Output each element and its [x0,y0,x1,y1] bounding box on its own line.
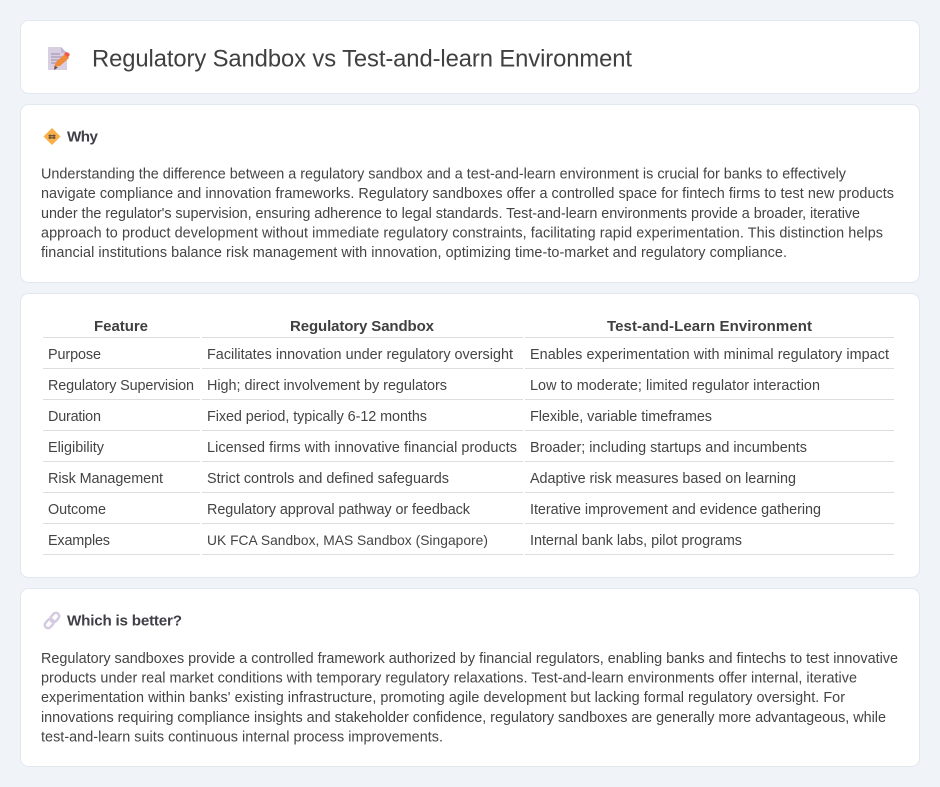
icon: chain link [43,612,61,629]
row: regulatory supervision: Regulatory Supervision [48,378,194,394]
row: purpose: Enables experimentation with minimal regulatory impact [530,347,889,363]
row: outcome: Regulatory approval pathway or feedback [207,502,471,518]
row: eligibility: Eligibility [48,440,105,456]
row: risk management: Risk Management [48,471,163,487]
row: regulatory supervision: High; direct involvement by regulators [207,378,447,394]
row: purpose: Facilitates innovation under regulatory oversight [207,347,513,363]
row: eligibility [48,440,807,456]
heading: which is better: Which is better? [67,612,182,630]
row: duration: Duration [48,409,101,425]
table header [94,318,812,335]
row: examples: Examples [48,533,110,549]
text block: which is better explanation: experimentation within banks' existing infrastructure, promoting agile development but lacking formal regulatory oversight. For [41,690,845,706]
heading: why: Why [67,128,99,146]
text block: why explanation: approach to product development without immediate regulatory constraints, facilitating rapid experimentation. This distinction helps [41,225,883,241]
row: outcome [48,502,821,518]
text block: which is better explanation: products under real market conditions with temporary regulatory relaxations. Test-and-learn environments offer internal, iterative [41,671,857,687]
row: eligibility: Broader; including startups and incumbents [530,440,807,456]
text block: which is better explanation [41,651,898,745]
row: duration: Fixed period, typically 6-12 months [207,409,427,425]
row: risk management: Strict controls and defined safeguards [207,471,449,487]
table header: Test-and-Learn Environment [607,318,812,335]
row: risk management [48,471,796,487]
row: outcome: Iterative improvement and evidence gathering [530,502,821,518]
row: examples: Internal bank labs, pilot programs [530,533,742,549]
row: regulatory supervision: Low to moderate; limited regulator interaction [530,378,820,394]
table header: Regulatory Sandbox [290,318,435,335]
row: purpose: Purpose [48,347,101,363]
panel: which is better [20,588,920,766]
row: purpose [48,347,889,363]
row: duration: Flexible, variable timeframes [530,409,712,425]
icon: memo with pencil [48,47,70,70]
panel: comparison table [20,294,920,578]
row: risk management: Adaptive risk measures based on learning [530,471,796,487]
text block: why explanation: under the regulator's supervision, ensuring adherence to legal standards. Test-and-learn environments provide a broader, iterative [41,206,860,222]
panel: title header [20,20,920,94]
row: duration [48,409,712,425]
text block: why explanation: Understanding the difference between a regulatory sandbox and a test-and-learn environment is crucial for banks to effectively [41,167,847,183]
text block: which is better explanation: test-and-learn suits continuous internal process improvements. [41,729,443,745]
row: examples [48,533,742,549]
table header: Feature [94,318,148,335]
panel: why [20,104,920,282]
row: outcome: Outcome [48,502,106,518]
text block: which is better explanation: innovations requiring compliance insights and stakeholder confidence, regulatory sandboxes are generally more advantageous, while [41,710,886,726]
text block: why explanation [41,167,894,261]
text block: why explanation: navigate compliance and innovation frameworks. Regulatory sandboxes offer a controlled space for fintech firms to test new products [41,186,894,202]
row: regulatory supervision [48,378,820,394]
row: eligibility: Licensed firms with innovative financial products [207,440,517,456]
icon: orange diamond [44,128,60,145]
title: Regulatory Sandbox vs Test-and-learn Environment [92,46,632,72]
row: examples: UK FCA Sandbox, MAS Sandbox (Singapore) [207,533,488,548]
text block: why explanation: financial institutions balance risk management with innovation, optimizing time-to-market and regulatory compliance. [41,245,787,261]
text block: which is better explanation: Regulatory sandboxes provide a controlled framework authorized by financial regulators, enabling banks and fintechs to test innovative [41,651,898,667]
